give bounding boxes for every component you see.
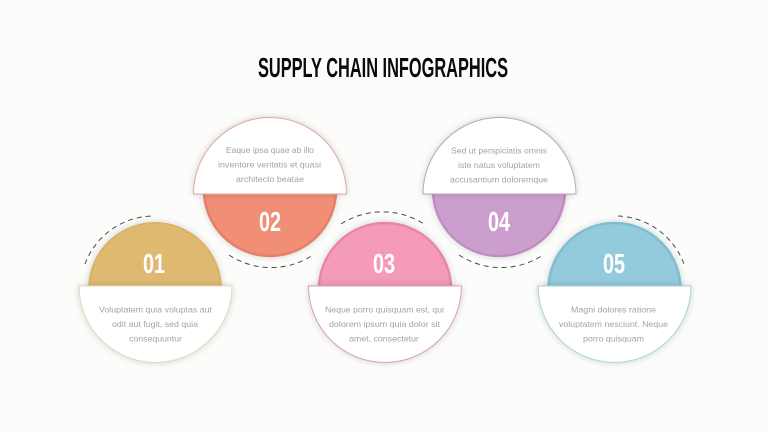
white half circle 04 — [423, 118, 576, 194]
white half circle 02 — [194, 118, 346, 194]
number 01: 01 — [143, 248, 165, 279]
text 01: Voluptatem quia voluptas aut — [99, 304, 213, 314]
dashed arc 02 — [229, 255, 313, 268]
text 05: voluptatem nesciunt. Neque — [559, 319, 668, 329]
step 01 — [79, 216, 232, 362]
dashed arc 03 — [341, 212, 424, 224]
colored circle 03 — [319, 223, 451, 355]
step 03 — [308, 212, 462, 362]
colored circle 02 — [204, 124, 336, 256]
number 02: 02 — [259, 206, 281, 237]
title: SUPPLY CHAIN INFOGRAPHICS — [258, 52, 508, 83]
step 04 — [423, 118, 576, 268]
text 05: porro quisquam — [583, 334, 644, 344]
text 01: consequuntur — [129, 334, 182, 344]
white half circle 05 — [538, 286, 691, 362]
text 02: inventore veritatis et quasi — [218, 160, 321, 170]
text 04: iste natus voluptatem — [458, 160, 540, 170]
text 03 — [325, 304, 444, 344]
text 03: Neque porro quisquam est, qui — [325, 304, 444, 314]
dashed arc 04 — [459, 255, 543, 268]
text 03: amet, consectetur — [349, 334, 419, 344]
number 03: 03 — [373, 248, 395, 279]
white half circle 01 — [79, 286, 232, 362]
dashed arc 05 — [618, 216, 685, 267]
text 04: Sed ut perspiciatis omnis — [451, 146, 547, 156]
text 02: architecto beatae — [236, 174, 304, 184]
number 04: 04 — [488, 206, 510, 237]
text 04 — [450, 146, 548, 184]
text 05: Magni dolores ratione — [571, 304, 656, 314]
colored circle 01 — [89, 223, 221, 355]
number 05: 05 — [603, 248, 625, 279]
step 02 — [194, 118, 346, 268]
colored circle 05 — [548, 223, 680, 355]
text 04: accusantium doloremque — [450, 174, 548, 184]
text 01 — [99, 304, 213, 344]
text 01: odit aut fugit, sed quia — [112, 319, 198, 329]
text 05 — [559, 304, 668, 344]
dashed arc 01 — [85, 216, 153, 264]
white half circle 03 — [308, 286, 462, 362]
text 02: Eaque ipsa quae ab illo — [226, 145, 314, 155]
text 03: dolorem ipsum quia dolor sit — [329, 319, 441, 329]
text 02 — [218, 145, 321, 184]
colored circle 04 — [433, 124, 565, 256]
step 05 — [538, 216, 691, 362]
